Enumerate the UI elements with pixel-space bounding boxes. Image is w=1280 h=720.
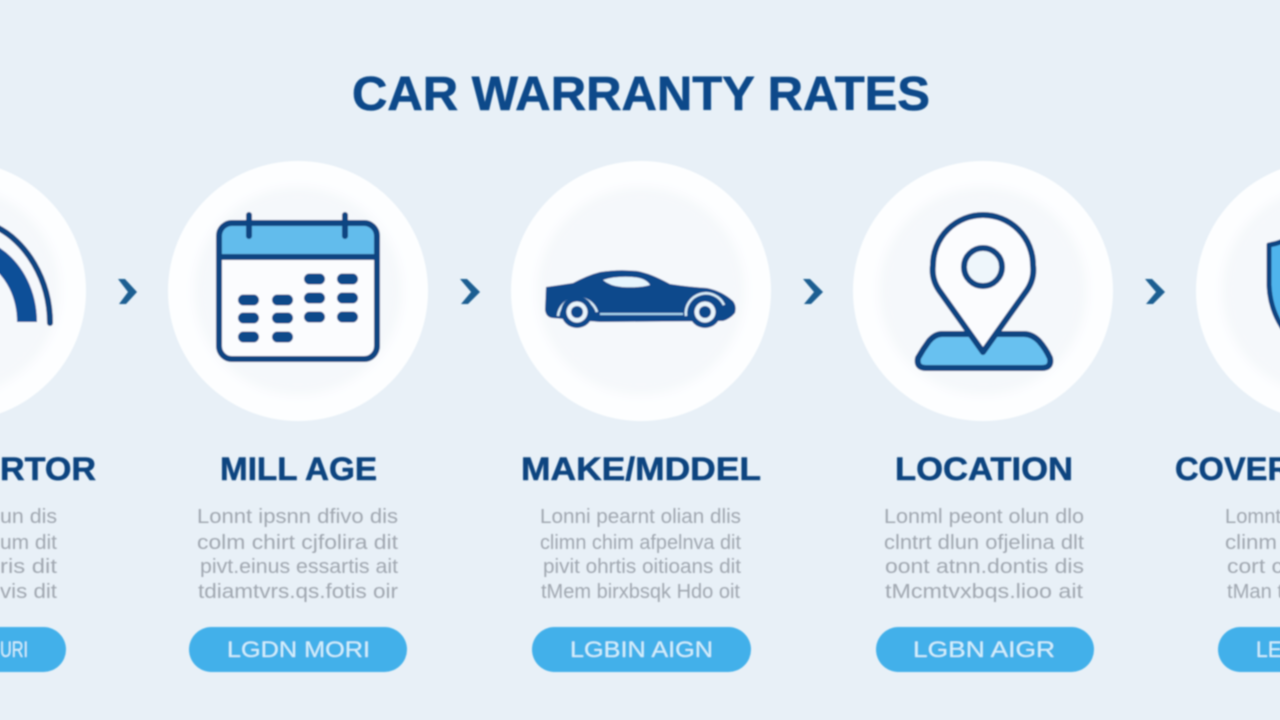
panel: mileage [168,161,428,672]
text block: coverage: cort c [1227,556,1280,578]
button: make/model: LGBIN AIGN [570,637,713,662]
icon circle: location [853,161,1113,421]
text block: location: tMcmtvxbqs.lioo ait [885,581,1084,603]
text block: coverage [1225,506,1280,603]
text block: coverage: clinm [1225,532,1277,554]
text block: mileage [197,506,398,603]
text block: factor: vis dit [0,581,57,603]
icon circle: shield [1196,161,1280,421]
text block: location [884,506,1084,603]
button: factor: URI [0,637,28,662]
panel: make/model [511,161,771,672]
icon: gauge [0,226,50,323]
heading: factor: RTOR [0,451,96,487]
icon circle: gauge [0,161,86,421]
text block: make/model: tMem birxbsqk Hdo oit [541,581,740,603]
arrow 4 [1145,279,1165,304]
heading: mileage: MILL AGE [220,451,377,487]
icon: calendar [219,215,377,359]
heading: make/model: MAKE/MDDEL [521,451,761,487]
text block: mileage: Lonnt ipsnn dfivo dis [197,506,398,528]
icon: car [545,270,736,328]
button: make/model [532,627,751,672]
text block: make/model: climn chim afpelnva dit [540,532,741,554]
arrow 1 [118,279,137,304]
text block: make/model [540,506,741,603]
text block: factor: un dis [0,506,57,528]
icon: location pin [918,215,1050,368]
button: location: LGBN AIGR [913,637,1055,662]
button: factor [0,627,66,672]
text block: mileage: tdiamtvrs.qs.fotis oir [198,581,398,603]
title: CAR WARRANTY RATES [352,68,930,121]
text block: factor [0,506,58,603]
text block: factor: um dit [0,532,57,554]
text block: location: Lonml peont olun dlo [884,506,1084,528]
icon circle: car [511,161,771,421]
text block: location: oont atnn.dontis dis [885,556,1084,578]
button: location [876,627,1094,672]
text block: make/model: Lonni pearnt olian dlis [540,506,741,528]
text block: coverage: Lomnt [1225,506,1280,528]
arrow 3 [803,279,823,304]
panel: location [853,161,1113,672]
text block: mileage: colm chirt cjfolira dit [197,532,398,554]
icon: shield [1269,238,1280,330]
panel: coverage (cropped right) [1175,161,1280,672]
text block: make/model: pivit ohrtis oitioans dit [543,556,741,578]
icon circle: calendar [168,161,428,421]
text block: mileage: pivt.einus essartis ait [200,556,398,578]
arrow 2 [460,279,480,304]
button: mileage: LGDN MORI [227,637,370,662]
button: mileage [189,627,407,672]
button: coverage [1218,627,1280,672]
panel: factor (cropped left) [0,161,96,672]
heading: location: LOCATION [895,451,1073,487]
text block: location: clntrt dlun ofjelina dlt [884,532,1084,554]
text block: factor: ris dit [0,556,58,578]
